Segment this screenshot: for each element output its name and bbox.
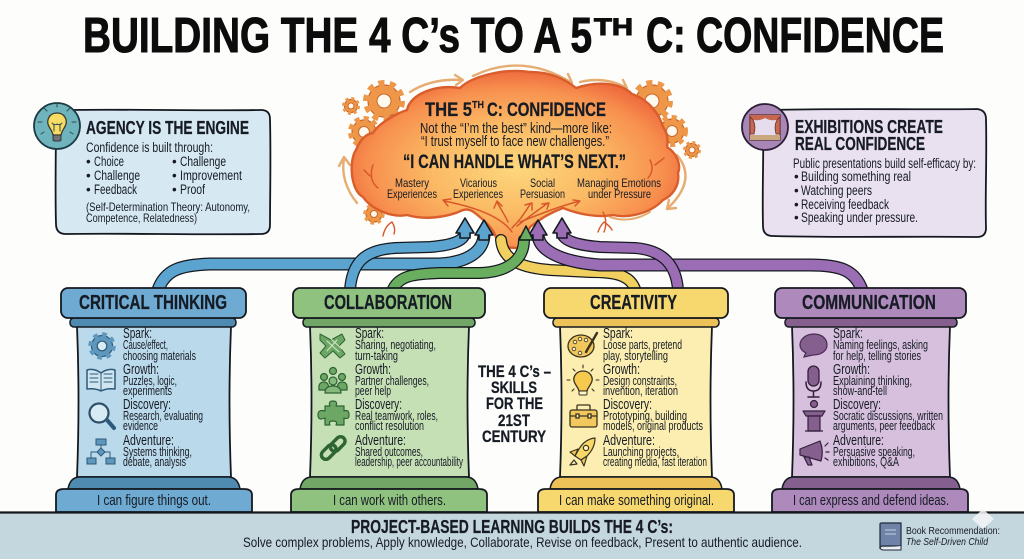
heading: COLLABORATION [324, 292, 452, 314]
text block: self-efficacy: • [794, 210, 799, 225]
text block: stages: turn-taking [355, 349, 398, 363]
icon: magnifying glass [90, 404, 114, 428]
text block: self-efficacy: • [794, 169, 799, 184]
icon: flowchart [87, 439, 115, 464]
center label: the 4 C's: 21ST [498, 412, 530, 430]
text block: built through: Challenge [180, 154, 226, 169]
text block: self-efficacy: Speaking under pressure. [801, 210, 918, 225]
icon: open book [87, 369, 115, 391]
text block: stages: Adventure: [355, 433, 406, 449]
text block: not the I'm the best kind: “I trust myself to face new challenges.” [421, 134, 609, 150]
cloud: the 5th C confidence [352, 71, 679, 248]
callout: I can figure things out: I can figure things out. [97, 493, 211, 509]
text block: stages: Shared outcomes, [355, 445, 423, 459]
text block: stages: Puzzles, logic, [123, 374, 177, 388]
text block: four sources of confidence: Persuasion [520, 187, 565, 201]
text block: self-efficacy [793, 156, 976, 225]
pillar: collaboration [291, 288, 487, 512]
text block: stages [833, 326, 943, 469]
text block: four sources of confidence: Vicarious [460, 176, 497, 190]
text block: stages: Real teamwork, roles, [355, 409, 438, 423]
icon: stage curtains [742, 104, 788, 150]
text block: four sources of confidence [387, 176, 661, 201]
text block: stages: Spark: [603, 326, 633, 342]
text block: stages: Adventure: [833, 433, 884, 449]
text block: stages: evidence [123, 419, 158, 433]
text block: built through: • [172, 154, 177, 169]
center label: the 4 C's [478, 363, 551, 446]
heading: TH [472, 100, 484, 111]
icon: people group [319, 368, 347, 393]
text block: stages: Spark: [833, 326, 863, 342]
text block: stages: Sharing, negotiating, [355, 338, 436, 352]
icon: puzzle piece [318, 401, 349, 425]
text block: book recommendation [906, 525, 1000, 548]
text block: stages: arguments, peer feedback [833, 419, 936, 433]
arrow: critical thinking to confidence [158, 220, 493, 290]
heading: CREATIVITY [590, 292, 677, 314]
arrow: creativity to confidence [501, 240, 635, 289]
icon: toolbox [570, 405, 597, 427]
text block: not the I'm the best kind: Not the “I’m the best” kind—more like: [420, 121, 612, 137]
callout: I can make something original: I can make something original. [559, 493, 714, 509]
text block: stages: Launching projects, [603, 445, 679, 459]
text block: built through: • [172, 168, 177, 183]
text block: four sources of confidence: Managing Emotions [577, 176, 661, 190]
text block: book recommendation: The Self-Driven Child [906, 536, 989, 548]
icon: podium speaker [803, 400, 825, 431]
callout: I can express and defend ideas: I can express and defend ideas. [793, 493, 949, 509]
text block: book recommendation: Book Recommendation: [906, 525, 1000, 537]
title: TH [594, 14, 633, 41]
text block: stages: experiments [123, 384, 172, 398]
text block: built through: Feedback [94, 182, 137, 197]
text block: self-efficacy: • [794, 197, 799, 212]
text block: stages: Adventure: [603, 433, 655, 449]
text block: stages: Research, evaluating [123, 409, 203, 423]
icon: joined hands [320, 334, 345, 358]
text block: built through: • [86, 182, 91, 197]
icon: megaphone [800, 441, 829, 465]
callout: I can handle what's next: “I CAN HANDLE WHAT’S NEXT.” [403, 151, 626, 173]
text block: built through: • [86, 168, 91, 183]
pillar: critical thinking [56, 288, 252, 512]
text block: stages: peer help [355, 384, 391, 398]
icon: book [880, 523, 901, 550]
arrow: collaboration to confidence (green) [393, 226, 533, 289]
heading: COMMUNICATION [802, 292, 936, 314]
text block: self-efficacy: Building something real [801, 169, 911, 184]
center label: the 4 C's: THE 4 C’s – [478, 363, 551, 381]
icon: light bulb [34, 103, 80, 149]
icon: rocket [570, 438, 595, 466]
text block: stages: Prototyping, building [603, 409, 687, 423]
text block: built through: Challenge [94, 168, 140, 183]
text block: stages: Cause/effect, [123, 338, 168, 352]
icon: chain link [320, 435, 347, 461]
text block: stages: Growth: [123, 362, 159, 378]
text block: stages: Socratic discussions, written [833, 409, 943, 423]
text block: stages: invention, iteration [603, 384, 678, 398]
arrow: communication to confidence [529, 220, 862, 290]
center label: the 4 C's: SKILLS [491, 379, 537, 397]
text block: project skills: Solve complex problems, Apply knowledge, Collaborate, Revise on feedback, Present to authentic audience. [243, 534, 802, 550]
arrow: collaboration to confidence (blue) [350, 218, 474, 290]
text block: stages: Explaining thinking, [833, 374, 912, 388]
text block: stages: exhibitions, Q&A [833, 455, 899, 469]
heading: PROJECT-BASED LEARNING BUILDS THE 4 C’s: [351, 517, 673, 537]
text block: four sources of confidence: Experiences [453, 187, 503, 201]
text block: stages: models, original products [603, 419, 703, 433]
text block: stages: leadership, peer accountability [355, 455, 463, 469]
icon: light bulb [567, 365, 599, 395]
text block: stages: Persuasive speaking, [833, 445, 915, 459]
flame stem branches and inner arrows [364, 158, 664, 236]
text block: stages: Growth: [603, 362, 640, 378]
text block: built through: Proof [180, 182, 205, 197]
text block: stages: Loose parts, pretend [603, 338, 682, 352]
text block: theory note: Competence, Relatedness) [86, 211, 197, 225]
text block: four sources of confidence: Mastery [395, 176, 429, 190]
text block: stages: conflict resolution [355, 419, 424, 433]
heading: THE 5 [425, 100, 472, 121]
text block: stages [355, 326, 463, 469]
text block: stages: Partner challenges, [355, 374, 429, 388]
text block: stages: Adventure: [123, 433, 174, 449]
title: C: CONFIDENCE [646, 9, 944, 63]
text block: stages: creating media, fast iteration [603, 455, 707, 469]
text block: theory note: (Self-Determination Theory: Autonomy, [86, 200, 250, 214]
icon: microphone [806, 366, 821, 397]
heading: REAL CONFIDENCE [795, 133, 925, 154]
icon: small tan arrows around cloud [339, 66, 685, 220]
icon: paint palette [568, 333, 597, 357]
center label: the 4 C's: CENTURY [482, 428, 546, 446]
text block: self-efficacy: • [794, 183, 799, 198]
text block: stages [603, 326, 707, 469]
text block: stages [123, 326, 203, 469]
text block: stages: Growth: [355, 362, 391, 378]
text block: stages: debate, analysis [123, 455, 186, 469]
heading: AGENCY IS THE ENGINE [86, 117, 249, 138]
center label: the 4 C's: FOR THE [486, 395, 543, 413]
icon: orange gears around cloud [344, 83, 700, 223]
heading [425, 100, 606, 121]
icon: speech bubble [800, 334, 827, 357]
watermark diamond [972, 509, 994, 529]
text block: four sources of confidence: Social [530, 176, 555, 190]
text block: built through: Improvement [180, 168, 242, 183]
heading: C: CONFIDENCE [487, 100, 606, 121]
text block: stages: Naming feelings, asking [833, 338, 928, 352]
text block: stages: Growth: [833, 362, 870, 378]
icon: gear [90, 334, 114, 358]
banner: project-based learning [0, 509, 1024, 559]
callout: I can work with others: I can work with others. [333, 493, 446, 509]
text block: built through: Choice [94, 154, 124, 169]
text block: stages: for help, telling stories [833, 349, 921, 363]
text block: built through: Confidence is built through: [86, 140, 213, 155]
text block: stages: show-and-tell [833, 384, 887, 398]
text block: stages: play, storytelling [603, 349, 668, 363]
text block: four sources of confidence: Experiences [387, 187, 437, 201]
text block: stages: Spark: [355, 326, 384, 342]
text block: stages: Discovery: [833, 397, 881, 413]
text block: theory note [86, 200, 250, 225]
title: BUILDING THE 4 C’s TO A 5 [83, 9, 592, 63]
arrow: creativity second strand (purple) [553, 218, 678, 290]
text block: built through [86, 140, 242, 197]
text block: not the I'm the best kind [420, 121, 612, 150]
text block: self-efficacy: Receiving feedback [801, 197, 889, 212]
text block: stages: choosing materials [123, 349, 196, 363]
text block: self-efficacy: Watching peers [801, 183, 872, 198]
text block: stages: Discovery: [123, 397, 171, 413]
text block: built through: • [86, 154, 91, 169]
text block: stages: Spark: [123, 326, 152, 342]
pillar: creativity [538, 288, 734, 512]
text block: four sources of confidence: under Pressure [588, 187, 651, 201]
pillar: communication [772, 288, 968, 512]
heading: CRITICAL THINKING [79, 292, 227, 314]
heading [795, 116, 943, 154]
text block: stages: Discovery: [603, 397, 652, 413]
panel: exhibitions create real confidence [742, 104, 986, 237]
text block: built through: • [172, 182, 177, 197]
panel: agency is the engine [34, 103, 270, 234]
text block: stages: Design constraints, [603, 374, 677, 388]
text block: stages: Discovery: [355, 397, 402, 413]
text block: stages: Systems thinking, [123, 445, 192, 459]
heading: EXHIBITIONS CREATE [795, 116, 943, 137]
